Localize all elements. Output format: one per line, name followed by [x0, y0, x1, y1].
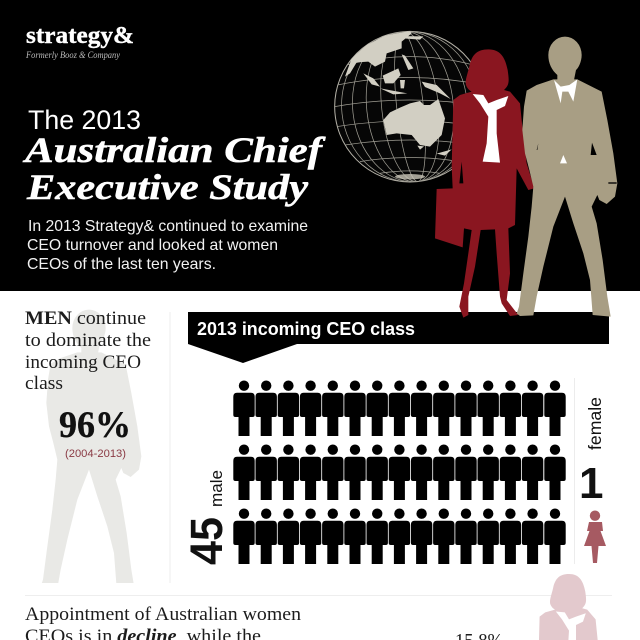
intro text: CEO turnover and looked at women: [27, 237, 278, 254]
icon: pale woman silhouette: [538, 574, 598, 640]
icon: man silhouette: [517, 37, 617, 317]
title: [23, 105, 326, 207]
intro text: [27, 218, 308, 273]
blouse: [473, 94, 508, 163]
label: 45 male: male: [207, 470, 226, 507]
shirt collar: [554, 79, 577, 103]
text: women appointments: [25, 605, 301, 640]
intro text: In 2013 Strategy& continued to examine: [28, 218, 308, 235]
label: 1 female: [579, 397, 605, 508]
banner: incoming CEO class: 2013 incoming CEO class: [197, 319, 415, 339]
date range: (2004-2013): [65, 448, 126, 460]
men text: class: [25, 374, 63, 394]
men text: incoming CEO: [25, 353, 141, 373]
icon: pale man silhouette: [41, 310, 141, 590]
intro text: CEOs of the last ten years.: [27, 256, 216, 273]
men text: to dominate the: [25, 331, 151, 351]
icon: female figure: [584, 510, 606, 563]
banner: incoming CEO class: [188, 312, 609, 363]
label: 45 male: 45: [181, 517, 232, 565]
logo: Formerly Booz & Company: [25, 50, 120, 60]
header panel: [0, 0, 640, 291]
label: 45 male: [181, 470, 232, 565]
logo: strategy&: [26, 23, 134, 49]
title: Executive Study: [26, 167, 309, 207]
title: The 2013: [28, 105, 141, 135]
men text: MEN continue: [25, 309, 146, 329]
icon: woman silhouette: [435, 49, 534, 318]
label: 1 female: female: [585, 397, 605, 450]
icon: globe: [334, 30, 471, 182]
text: women appointments: Appointment of Australian women: [25, 605, 301, 625]
men text: [25, 309, 151, 394]
panel: men statistic: [25, 309, 151, 590]
logo: [25, 23, 134, 60]
title: Australian Chief: [23, 130, 326, 170]
pictogram chart: 45 male CEOs: [233, 380, 566, 564]
96 percent: 96%: [59, 405, 131, 446]
label: 1 female: 1: [579, 459, 603, 508]
